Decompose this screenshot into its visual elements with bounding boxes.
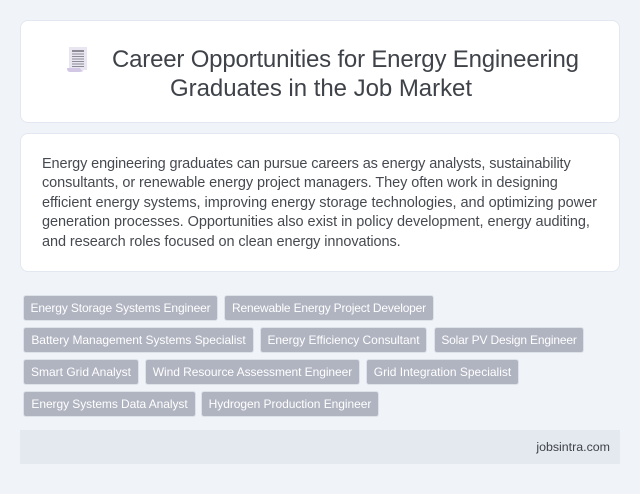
tag [260, 327, 427, 353]
tag list [23, 295, 584, 417]
tag: Smart Grid Analyst [31, 365, 131, 379]
panel: description [20, 133, 620, 272]
tag: Energy Storage Systems Engineer [30, 301, 211, 315]
tag [434, 327, 584, 353]
tag: Wind Resource Assessment Engineer [153, 365, 352, 379]
title: Career Opportunities for Energy Engineering [112, 46, 579, 73]
tag [23, 295, 218, 321]
tag: Renewable Energy Project Developer [232, 301, 426, 315]
tag: Hydrogen Production Engineer [209, 397, 371, 411]
description text: consultants, or renewable energy project managers. They often work in designing [42, 175, 558, 191]
footer source text: jobsintra.com [536, 440, 610, 454]
header panel [20, 20, 620, 123]
tag [23, 391, 196, 417]
tag: Energy Efficiency Consultant [267, 333, 420, 347]
footer bar [20, 430, 620, 464]
description text: efficient energy systems, improving energy storage technologies, and optimizing power [42, 195, 597, 211]
tag [224, 295, 434, 321]
title [112, 46, 579, 102]
icon: scroll document [67, 47, 87, 72]
tag: Energy Systems Data Analyst [31, 397, 188, 411]
description text: generation processes. Opportunities also exist in policy development, energy auditing, [42, 214, 590, 230]
tag [23, 359, 139, 385]
tag [23, 327, 254, 353]
tag [201, 391, 379, 417]
tag [145, 359, 360, 385]
title: Graduates in the Job Market [170, 75, 472, 102]
description text [42, 156, 597, 250]
description text: Energy engineering graduates can pursue careers as energy analysts, sustainability [42, 156, 571, 172]
tag: Solar PV Design Engineer [441, 333, 577, 347]
tag: Grid Integration Specialist [374, 365, 511, 379]
tag [366, 359, 519, 385]
tag: Battery Management Systems Specialist [31, 333, 246, 347]
description text: and research roles focused on clean energy innovations. [42, 234, 401, 250]
